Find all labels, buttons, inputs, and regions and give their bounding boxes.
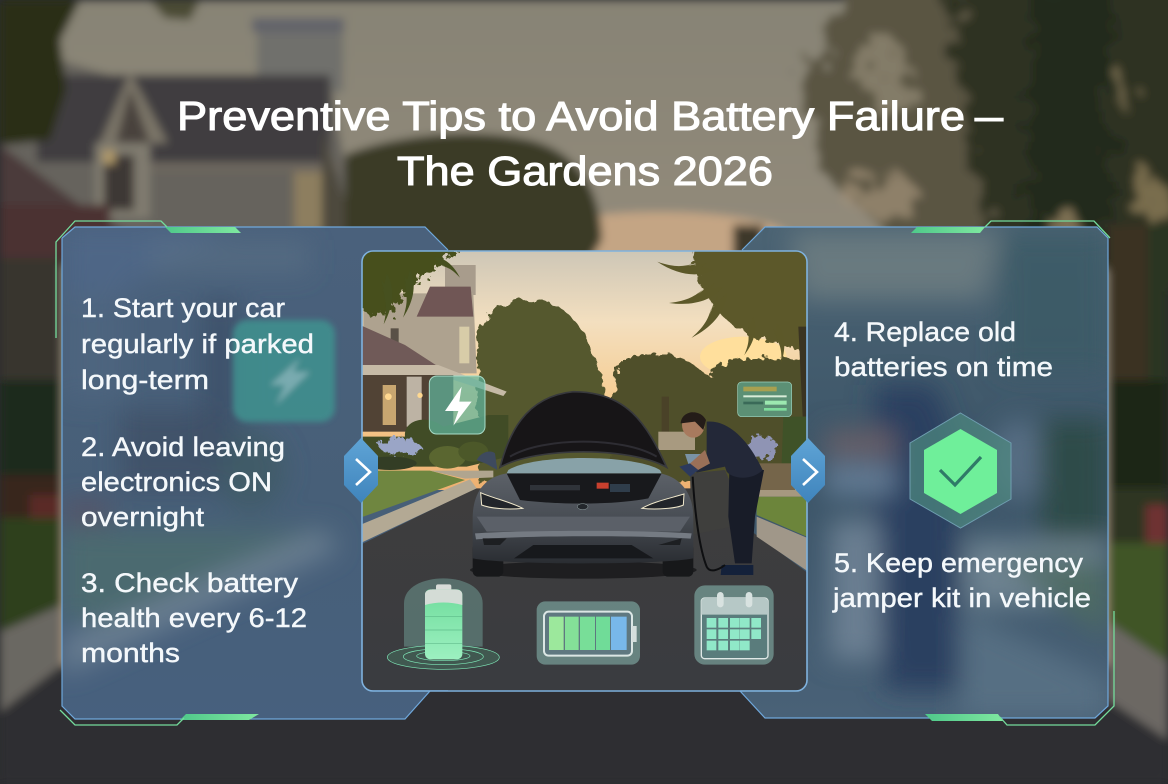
tip 4: batteries on time: [834, 352, 1053, 382]
photo: tree line behind car: [478, 300, 808, 483]
photo: right palm: [656, 240, 820, 417]
title: Preventive Tips to Avoid Battery Failure: [177, 93, 965, 139]
arrow: left hexagon chevron: [344, 438, 378, 503]
green corner accents: right panel: [911, 221, 1114, 725]
photo: driveway: [360, 488, 808, 690]
tip 1: long-term: [81, 365, 209, 395]
panel: right tips: [730, 220, 1120, 730]
photo: shrubs and flowers: [360, 415, 808, 492]
icon: hologram battery: [387, 578, 499, 669]
icon: check shield hexagon: [910, 413, 1011, 528]
title: –: [975, 93, 1003, 139]
title: [177, 93, 1003, 194]
tip 1: 1. Start your car: [81, 293, 285, 323]
tip 4: [834, 317, 1053, 382]
tip 3: [81, 568, 307, 668]
tip 2: [81, 432, 285, 532]
icon: charge level battery: [537, 601, 640, 665]
photo: technician: [679, 412, 764, 575]
photo: car: [470, 392, 731, 579]
tip 2: electronics ON: [81, 467, 272, 497]
tip 3: health every 6-12: [81, 603, 307, 633]
panel: central photo: [353, 240, 820, 691]
icon: lightning tile: [429, 376, 485, 434]
right margin: [1108, 225, 1168, 385]
photo: left palm: [362, 252, 460, 324]
tip 5: 5. Keep emergency: [834, 548, 1084, 578]
icon: calendar: [694, 585, 774, 665]
right palm: [806, 0, 1168, 280]
tip 1: regularly if parked: [81, 329, 314, 359]
tip 4: 4. Replace old: [834, 317, 1016, 347]
road: [0, 665, 1168, 784]
arrow: right hexagon chevron: [791, 438, 825, 503]
title: The Gardens 2026: [397, 148, 773, 194]
house: [257, 22, 343, 92]
tip 2: 2. Avoid leaving: [81, 432, 285, 462]
panel: left tips: [50, 220, 460, 730]
tip 5: [832, 548, 1091, 613]
left margin: [0, 258, 62, 383]
photo: lawns: [360, 471, 465, 517]
tip 3: 3. Check battery: [81, 568, 299, 598]
photo: sky: [360, 250, 810, 490]
tip 5: jamper kit in vehicle: [832, 583, 1091, 613]
photo: house: [360, 265, 507, 432]
tip 2: overnight: [81, 502, 205, 532]
tip 3: months: [81, 638, 180, 668]
tip 1: [81, 293, 314, 395]
icon: diagnostic readout tile: [738, 382, 792, 417]
centre trees: [345, 134, 602, 260]
green corner accents: left panel: [56, 221, 259, 725]
left tree: [0, 0, 80, 145]
